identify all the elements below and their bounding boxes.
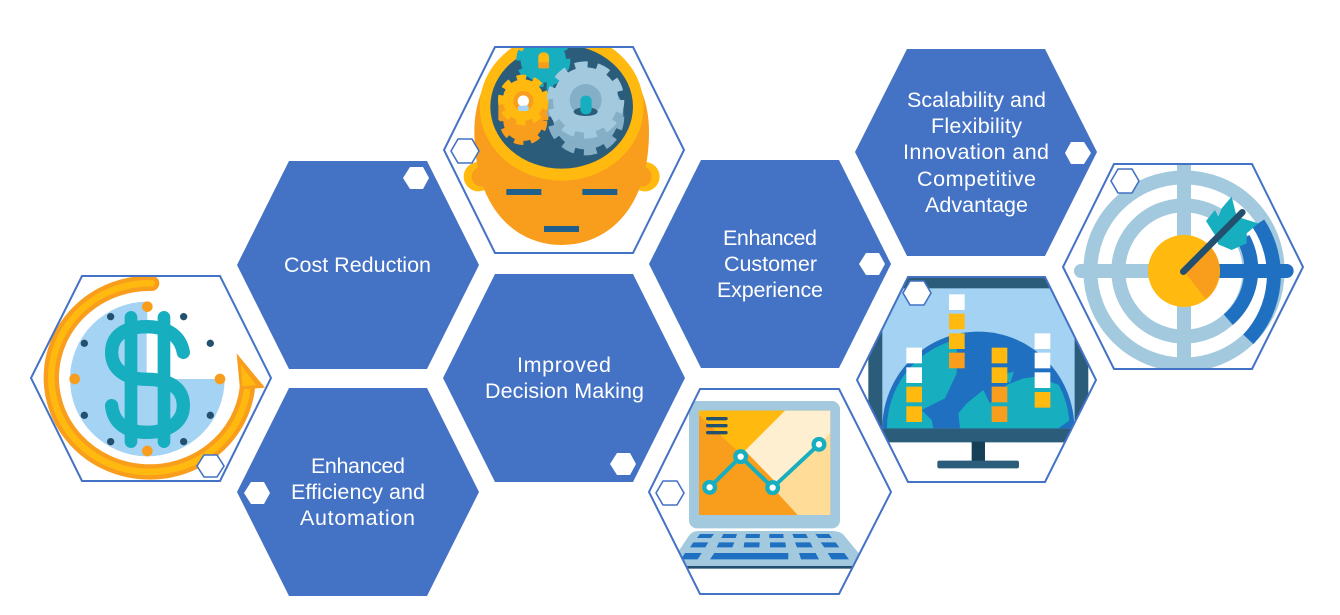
icon panel: laptop with line chart (649, 389, 891, 594)
badge: cost reduction (403, 167, 429, 189)
hexagon: Enhanced Efficiency and Automation (237, 388, 479, 596)
label: Enhanced Efficiency and Automation: Enhanced (311, 454, 405, 478)
label: Enhanced Customer Experience: Enhanced (723, 226, 817, 250)
badge: customer experience (859, 253, 885, 275)
icon: dollar clock drawing (51, 283, 265, 472)
badge: laptop (656, 481, 684, 505)
label: Scalability and Flexibility Innovation and Competitive Advantage: Innovation and (903, 140, 1049, 164)
icon panel: target with arrow (1063, 164, 1303, 369)
label: Scalability and Flexibility Innovation and Competitive Advantage (903, 88, 1049, 217)
badge: brain (451, 139, 479, 163)
icon panel: head with gears (444, 33, 684, 253)
icon: laptop drawing (675, 401, 862, 569)
outline: dollar hexagon (31, 276, 271, 481)
hexagon: Cost Reduction (237, 161, 479, 369)
outline: brain hexagon (444, 47, 684, 253)
label: Enhanced Customer Experience: Experience (717, 278, 823, 302)
outline: laptop hexagon (649, 389, 891, 594)
label: Enhanced Efficiency and Automation: Automation (300, 506, 415, 530)
icon: target drawing (1081, 165, 1287, 368)
badge: efficiency (244, 482, 270, 504)
label: Cost Reduction: Cost Reduction (284, 253, 431, 277)
label: Improved Decision Making: Improved (517, 353, 611, 377)
icon panel: monitor with globe (857, 277, 1096, 482)
hexagon: Scalability, Flexibility, Innovation (855, 49, 1097, 256)
label: Scalability and Flexibility Innovation and Competitive Advantage: Competitive (917, 167, 1036, 191)
outline: monitor hexagon (857, 277, 1096, 482)
label: Enhanced Efficiency and Automation: Efficiency and (291, 480, 425, 504)
label: Scalability and Flexibility Innovation and Competitive Advantage: Scalability and (907, 88, 1046, 112)
icon: monitor drawing (868, 277, 1088, 468)
hexagon: Improved Decision Making (443, 274, 685, 482)
badge: scalability (1065, 142, 1091, 164)
icon panel: dollar clock (31, 276, 271, 481)
label: Scalability and Flexibility Innovation and Competitive Advantage: Advantage (925, 193, 1028, 217)
badge: decision making (610, 453, 636, 475)
label: Enhanced Customer Experience: Customer (724, 252, 817, 276)
label: Enhanced Customer Experience (717, 226, 823, 302)
badge: dollar (197, 455, 224, 477)
outline: target hexagon (1063, 164, 1303, 369)
label: Improved Decision Making: Decision Making (485, 379, 644, 403)
badge: monitor (903, 281, 931, 305)
badge: target (1111, 169, 1139, 193)
label: Improved Decision Making (485, 353, 644, 403)
hexagon: Enhanced Customer Experience (649, 160, 891, 368)
label: Scalability and Flexibility Innovation and Competitive Advantage: Flexibility (931, 114, 1022, 138)
label: Enhanced Efficiency and Automation (291, 454, 425, 530)
icon: head with gears drawing (464, 33, 660, 245)
